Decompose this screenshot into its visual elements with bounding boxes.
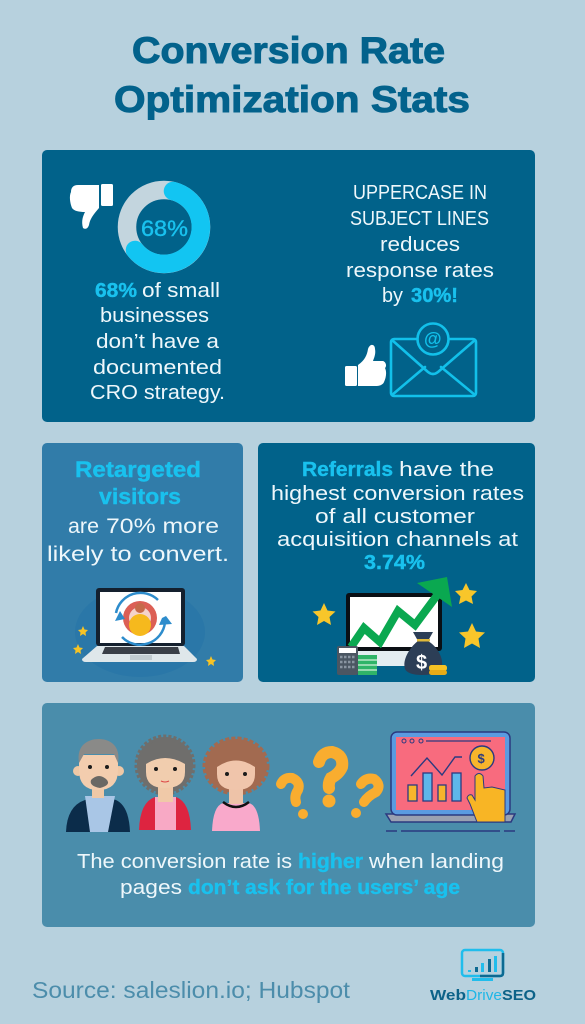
panel: small business and subject lines [42,150,535,422]
title: Optimization Stats [114,79,470,120]
panel: retargeted visitors [42,443,243,682]
icon: coins [429,665,447,675]
title [114,30,470,120]
icon: envelope with at sign [391,324,476,396]
text: conversion rate landing pages: higher [298,851,363,873]
title: Conversion Rate [132,30,445,71]
text: retargeted visitors: are [68,515,99,538]
icon: envelope with at sign: @ [424,329,442,349]
text: 68 percent of small businesses: don’t have a [96,331,220,353]
text: uppercase in subject lines: response rates [346,260,494,282]
icon: star [455,583,477,604]
text: conversion rate landing pages: The conversion rate is [77,851,292,873]
icon: banknotes [358,655,377,675]
text: conversion rate landing pages: don’t ask for the users’ age [188,877,460,899]
icon: laptop with analytics and pointing hand: $ [478,751,486,766]
text: uppercase in subject lines: by [382,285,403,307]
chart: 68 percent donut: 68% [141,216,188,241]
text: 68 percent of small businesses: businesses [100,305,209,327]
text: retargeted visitors: Retargeted [75,457,201,482]
text: 68 percent of small businesses: 68% [95,280,137,302]
icon: calculator [337,646,358,675]
text: uppercase in subject lines: UPPERCASE IN [353,182,487,204]
panel: landing page age [42,703,535,927]
text: referrals conversion rates: highest conversion rates [271,483,524,505]
chart: 68 percent donut [127,190,201,264]
icon: money bag [404,632,442,675]
text: uppercase in subject lines: SUBJECT LINES [350,208,489,230]
icon: thumbs up [345,345,386,386]
icon: star [459,623,485,648]
text: conversion rate landing pages: when landing [368,851,504,873]
text: referrals conversion rates: of all customer [315,506,475,528]
logo: WebDriveSEO [430,950,536,1004]
text: referrals conversion rates: 3.74% [364,552,425,574]
text: retargeted visitors [47,457,229,566]
logo: WebDriveSEO: Web [430,987,466,1004]
icon: grey-haired woman [137,737,193,830]
text: referrals conversion rates: have the [399,459,494,481]
text: conversion rate landing pages: pages [120,877,182,899]
text: uppercase in subject lines: 30%! [411,285,458,307]
text: 68 percent of small businesses: CRO strategy. [90,382,225,404]
source line: Source: saleslion.io; Hubspot [32,977,351,1003]
icon: laptop with analytics and pointing hand [386,732,515,831]
text: 68 percent of small businesses [90,280,225,404]
text: retargeted visitors: likely to convert. [47,543,229,566]
text: 68 percent of small businesses: of small [142,280,220,302]
text: retargeted visitors: visitors [99,484,181,509]
icon: star [312,603,336,625]
text: uppercase in subject lines [346,182,494,307]
text: uppercase in subject lines: reduces [380,234,460,256]
icon: thumbs down [70,184,113,229]
text: referrals conversion rates: Referrals [302,459,393,481]
panel: referrals [258,443,535,682]
text: referrals conversion rates: acquisition channels at [277,529,519,551]
icon: star [73,644,83,654]
icon: curly-haired woman [205,739,267,831]
icon: growth chart on monitor [312,577,485,675]
logo: WebDriveSEO: Drive [466,987,502,1004]
icon: money bag: $ [416,652,427,674]
text: 68 percent of small businesses: documented [93,357,222,379]
text: conversion rate landing pages [77,851,504,899]
icon: older man [66,739,130,832]
icon: star [206,656,216,666]
icon: star [78,626,88,636]
logo: WebDriveSEO: SEO [502,987,536,1004]
icon: laptop with retargeting loop [73,587,216,677]
icon: question marks [281,752,379,819]
text: retargeted visitors: 70% more [106,515,219,538]
text: referrals conversion rates [271,459,524,574]
